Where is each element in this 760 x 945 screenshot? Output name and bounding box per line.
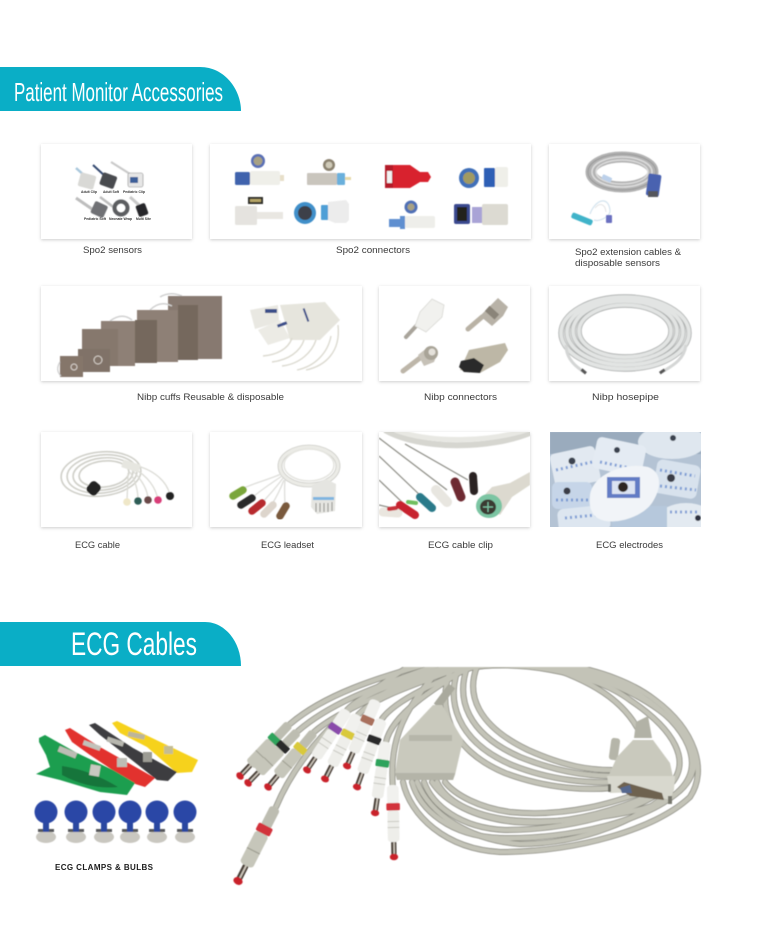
icon: six pulse oximetry sensors — [76, 162, 149, 218]
icon: reusable cuffs — [58, 294, 222, 377]
label: Spo2 extension cables and disposable sensors: Spo2 extension cables & — [575, 247, 682, 258]
panel: Spo2 sensors — [41, 144, 192, 239]
panel: Spo2 sensors: Adult Soft — [103, 190, 120, 194]
label: ECG electrodes: ECG electrodes — [596, 540, 663, 551]
panel: Spo2 sensors: Pediatric Clip — [123, 190, 146, 194]
icon: electrode patches photo — [550, 432, 701, 527]
lead: black white — [350, 717, 388, 792]
panel: Spo2 sensors: Multi Site — [136, 217, 151, 221]
panel: Nibp hosepipe — [549, 286, 700, 381]
coiled grey cables — [276, 660, 698, 852]
panel: ECG cable — [41, 432, 192, 527]
icon: coiled white hose — [561, 297, 689, 374]
caption: ECG clamps and bulbs: ECG CLAMPS & BULBS — [55, 863, 154, 872]
panel: Spo2 sensors: Pediatric Soft — [84, 217, 107, 221]
lead: green — [233, 719, 294, 783]
label: Nibp cuffs Reusable & disposable: Nibp cuffs Reusable & disposable — [137, 392, 284, 403]
icon: four Nibp connectors — [403, 298, 508, 373]
icon: coiled ECG cable with snap leads — [59, 448, 174, 506]
lead: green white — [368, 741, 392, 817]
heading: Patient Monitor Accessories: Patient Monitor Accessories — [14, 77, 223, 107]
DB15 connector — [607, 716, 675, 804]
lead: red grey — [229, 804, 283, 888]
panel: Spo2 connectors — [210, 144, 531, 239]
image: six blue suction bulbs — [34, 800, 196, 843]
image: ECG cable assembly — [229, 660, 698, 888]
splitter box — [395, 686, 463, 780]
banner: ECG Cables — [0, 622, 241, 666]
lead: black — [241, 727, 303, 790]
label: ECG cable: ECG cable — [75, 540, 120, 551]
lead: yellow — [318, 712, 364, 785]
panel: Spo2 sensors: Adult Clip — [81, 190, 98, 194]
label: Spo2 sensors: Spo2 sensors — [83, 245, 142, 256]
banner: Patient Monitor Accessories — [0, 67, 241, 111]
lead: brown — [340, 697, 382, 772]
label: Spo2 extension cables and disposable sensors: disposable sensors — [575, 258, 660, 269]
label: Nibp hosepipe: Nibp hosepipe — [592, 392, 659, 403]
image: coloured ECG limb clamps — [36, 721, 198, 795]
heading: ECG Cables: ECG Cables — [71, 626, 197, 662]
lead: yellow grey — [261, 727, 319, 794]
icon: cable clips and green connector — [379, 428, 532, 518]
panel: ECG leadset — [210, 432, 362, 527]
label: Spo2 connectors: Spo2 connectors — [336, 245, 410, 256]
label: Spo2 extension cables and disposable sensors — [575, 247, 682, 269]
panel: ECG electrodes — [550, 432, 701, 527]
panel: Spo2 sensors: Neonate Wrap — [109, 217, 133, 221]
label: Nibp connectors: Nibp connectors — [424, 392, 497, 403]
panel: ECG cable clip — [379, 428, 532, 527]
icon: leadset with coloured clips — [233, 447, 338, 516]
lead: red white — [386, 785, 401, 860]
icon: coiled extension cable and disposable sensor — [571, 154, 662, 226]
label: ECG cable clip: ECG cable clip — [428, 540, 493, 551]
panel: Spo2 extension cables — [549, 144, 700, 239]
icon: eight Spo2 connector plugs — [235, 154, 508, 229]
label: ECG leadset: ECG leadset — [261, 540, 314, 551]
lead: purple — [300, 707, 353, 776]
icon: disposable cuffs — [250, 302, 340, 370]
panel: Nibp connectors — [379, 286, 530, 381]
panel: Nibp cuffs — [41, 286, 362, 381]
